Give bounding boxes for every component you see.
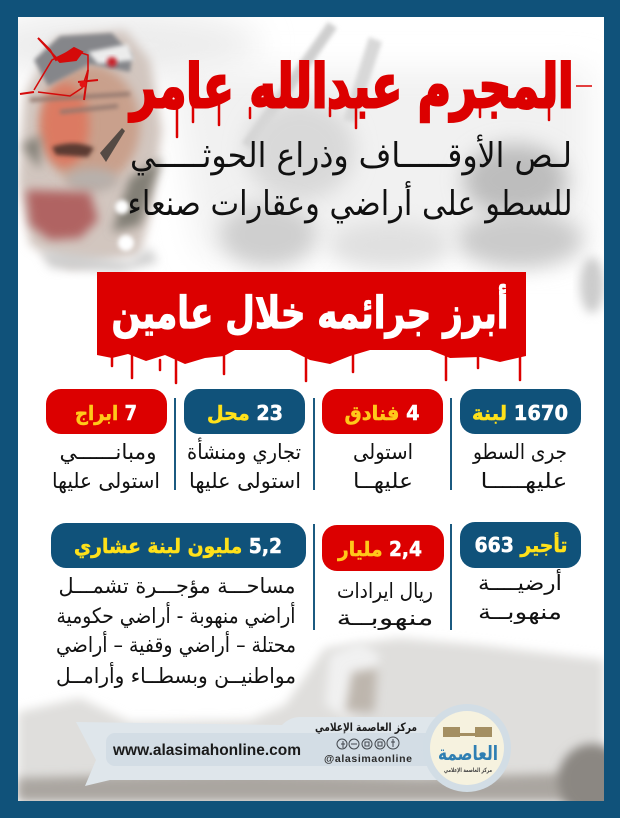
stat: 5.2 million xyxy=(51,523,306,688)
subtitle xyxy=(128,134,572,224)
stat: 1670 plots: جرى السطو xyxy=(472,440,567,464)
social icons xyxy=(337,737,399,749)
logo: Al Asima media center: العاصمة xyxy=(438,741,498,765)
stat: 5.2 million: محتلة – أراضي وقفية – أراضي xyxy=(56,631,296,657)
stat: 2.4 billion: منهوبــة xyxy=(336,606,434,630)
banner: key crimes heading with drips xyxy=(97,272,526,383)
stat: 4 hotels: استولى xyxy=(353,440,413,464)
stat: 23 shops xyxy=(184,389,305,493)
stat: 7 towers xyxy=(46,389,167,493)
website address: www.alasimahonline.com xyxy=(112,742,301,759)
media center contact block: @alasimaonline xyxy=(324,753,412,765)
stat: 4 hotels: 4 فنادق xyxy=(344,401,420,425)
stat: 23 shops: 23 محل xyxy=(207,401,283,425)
stat: 1670 plots xyxy=(460,389,581,493)
banner: key crimes heading with drips: أبرز جرائمه خلال عامين xyxy=(112,284,508,339)
background: crowd photo xyxy=(18,638,620,816)
subtitle: للسطو على أراضي وعقارات صنعاء xyxy=(128,181,572,224)
stat: 663 leases xyxy=(460,522,581,624)
stat: 5.2 million: أراضي منهوبة - أراضي حكومية xyxy=(56,602,296,628)
footer bar xyxy=(76,717,470,786)
stat: 7 towers: 7 ابراج xyxy=(75,401,137,425)
stat: 2.4 billion xyxy=(322,525,444,630)
stat: 7 towers: استولى عليها xyxy=(52,469,160,493)
stat: 663 leases: أرضيــــة xyxy=(478,569,562,595)
stat: 23 shops: تجاري ومنشأة xyxy=(187,437,301,464)
stat: 4 hotels: عليهــا xyxy=(353,469,413,493)
media center contact block xyxy=(315,720,417,765)
stat: 5.2 million: مساحـــة مؤجـــرة تشمـــل xyxy=(58,574,296,598)
logo: Al Asima media center xyxy=(423,704,511,792)
stat: 2.4 billion: ريال ايرادات xyxy=(337,579,433,603)
stat: 1670 plots: عليهـــــا xyxy=(480,469,568,493)
stat: 5.2 million: 5,2 مليون لبنة عشاري xyxy=(74,534,282,559)
stat: 663 leases: منهوبــة xyxy=(478,600,562,624)
media center contact block: مركز العاصمة الإعلامي xyxy=(315,720,417,734)
stat: 1670 plots: 1670 لبنة xyxy=(472,401,568,425)
stat: 7 towers: ومبانــــــي xyxy=(60,440,156,464)
background: armed fighters photo xyxy=(0,10,604,313)
divider lines xyxy=(175,398,451,630)
subtitle: لـص الأوقـــــاف وذراع الحوثـــــي xyxy=(130,134,572,176)
logo: Al Asima media center: مركز العاصمة الإعلامي xyxy=(444,767,492,774)
stat: 23 shops: استولى عليها xyxy=(189,469,301,493)
stat: 4 hotels xyxy=(322,389,443,493)
stat: 663 leases: تأجير 663 xyxy=(474,531,568,557)
stat: 5.2 million: مواطنيــن وبسطــاء وأرامــل xyxy=(56,662,296,688)
stat: 2.4 billion: 2,4 مليار xyxy=(337,537,422,561)
portrait of Abdullah Amer xyxy=(18,30,162,272)
